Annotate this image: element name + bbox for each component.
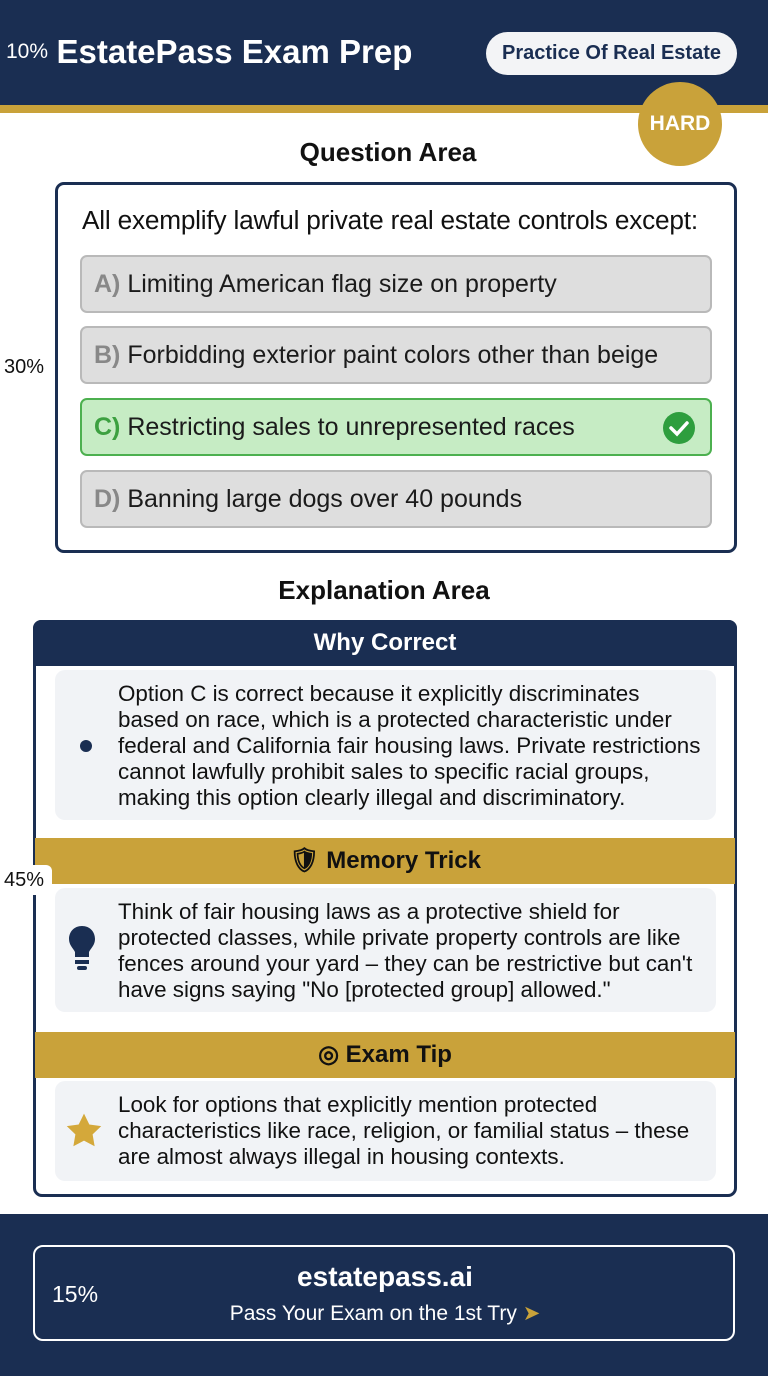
option C correct [80, 398, 712, 456]
label 45%: 45% [4, 869, 44, 891]
why correct card: making this option clearly illegal and discriminatory. [118, 785, 625, 810]
icon: check [663, 412, 695, 444]
exam tip card: characteristics like race, religion, or familial status – these [118, 1118, 689, 1143]
header [0, 0, 768, 105]
exam tip card: Look for options that explicitly mention protected [118, 1092, 597, 1117]
exam tip card: are almost always illegal in housing contexts. [118, 1144, 565, 1169]
difficulty badge [638, 82, 722, 166]
icon: bulb [69, 926, 95, 970]
why correct card: Option C is correct because it explicitly discriminates [118, 681, 639, 706]
exam tip bar: ◎ Exam Tip [318, 1041, 452, 1068]
memory card: protected classes, while private property controls are like [118, 925, 681, 950]
option D: D) Banning large dogs over 40 pounds [94, 485, 522, 513]
header title: 10% EstatePass Exam Prep [6, 33, 412, 70]
why correct card: based on race, which is a protected characteristic under [118, 707, 672, 732]
option B: B) Forbidding exterior paint colors other than beige [94, 341, 658, 369]
explanation heading: Explanation Area [278, 575, 490, 605]
option B [80, 326, 712, 384]
label 45% [0, 865, 52, 895]
footer box [33, 1245, 735, 1341]
memory card: fences around your yard – they can be restrictive but can't [118, 951, 692, 976]
option D [80, 470, 712, 528]
category pill [486, 32, 737, 75]
footer box: Pass Your Exam on the 1st Try ➤ [230, 1302, 540, 1325]
why correct card: cannot lawfully prohibit sales to specific racial groups, [118, 759, 649, 784]
category pill: Practice Of Real Estate [502, 42, 721, 64]
memory card [55, 888, 716, 1012]
why correct card [55, 670, 716, 820]
question heading: Question Area [300, 137, 476, 167]
difficulty badge: HARD [650, 112, 710, 135]
why correct card: federal and California fair housing laws. Private restrictions [118, 733, 700, 758]
memory trick bar: 🛡 Memory Trick [289, 847, 481, 874]
memory card: Think of fair housing laws as a protective shield for [118, 899, 620, 924]
exam tip card [55, 1081, 716, 1181]
footer box: estatepass.ai [297, 1261, 473, 1292]
explanation panel [33, 620, 737, 1197]
memory card: have signs saying "No [protected group] allowed." [118, 977, 611, 1002]
option C correct: C) Restricting sales to unrepresented races [94, 413, 575, 441]
memory trick bar [35, 838, 735, 884]
question box [55, 182, 737, 553]
footer [0, 1214, 768, 1376]
icon: star [66, 1114, 102, 1146]
exam tip bar [35, 1032, 735, 1078]
why correct bar [33, 620, 737, 666]
footer box: 15% [52, 1281, 98, 1307]
label 30%: 30% [4, 356, 44, 378]
option A [80, 255, 712, 313]
option A: A) Limiting American flag size on property [94, 270, 557, 298]
question text: All exemplify lawful private real estate controls except: [82, 205, 698, 235]
why correct bar: Why Correct [314, 629, 456, 656]
